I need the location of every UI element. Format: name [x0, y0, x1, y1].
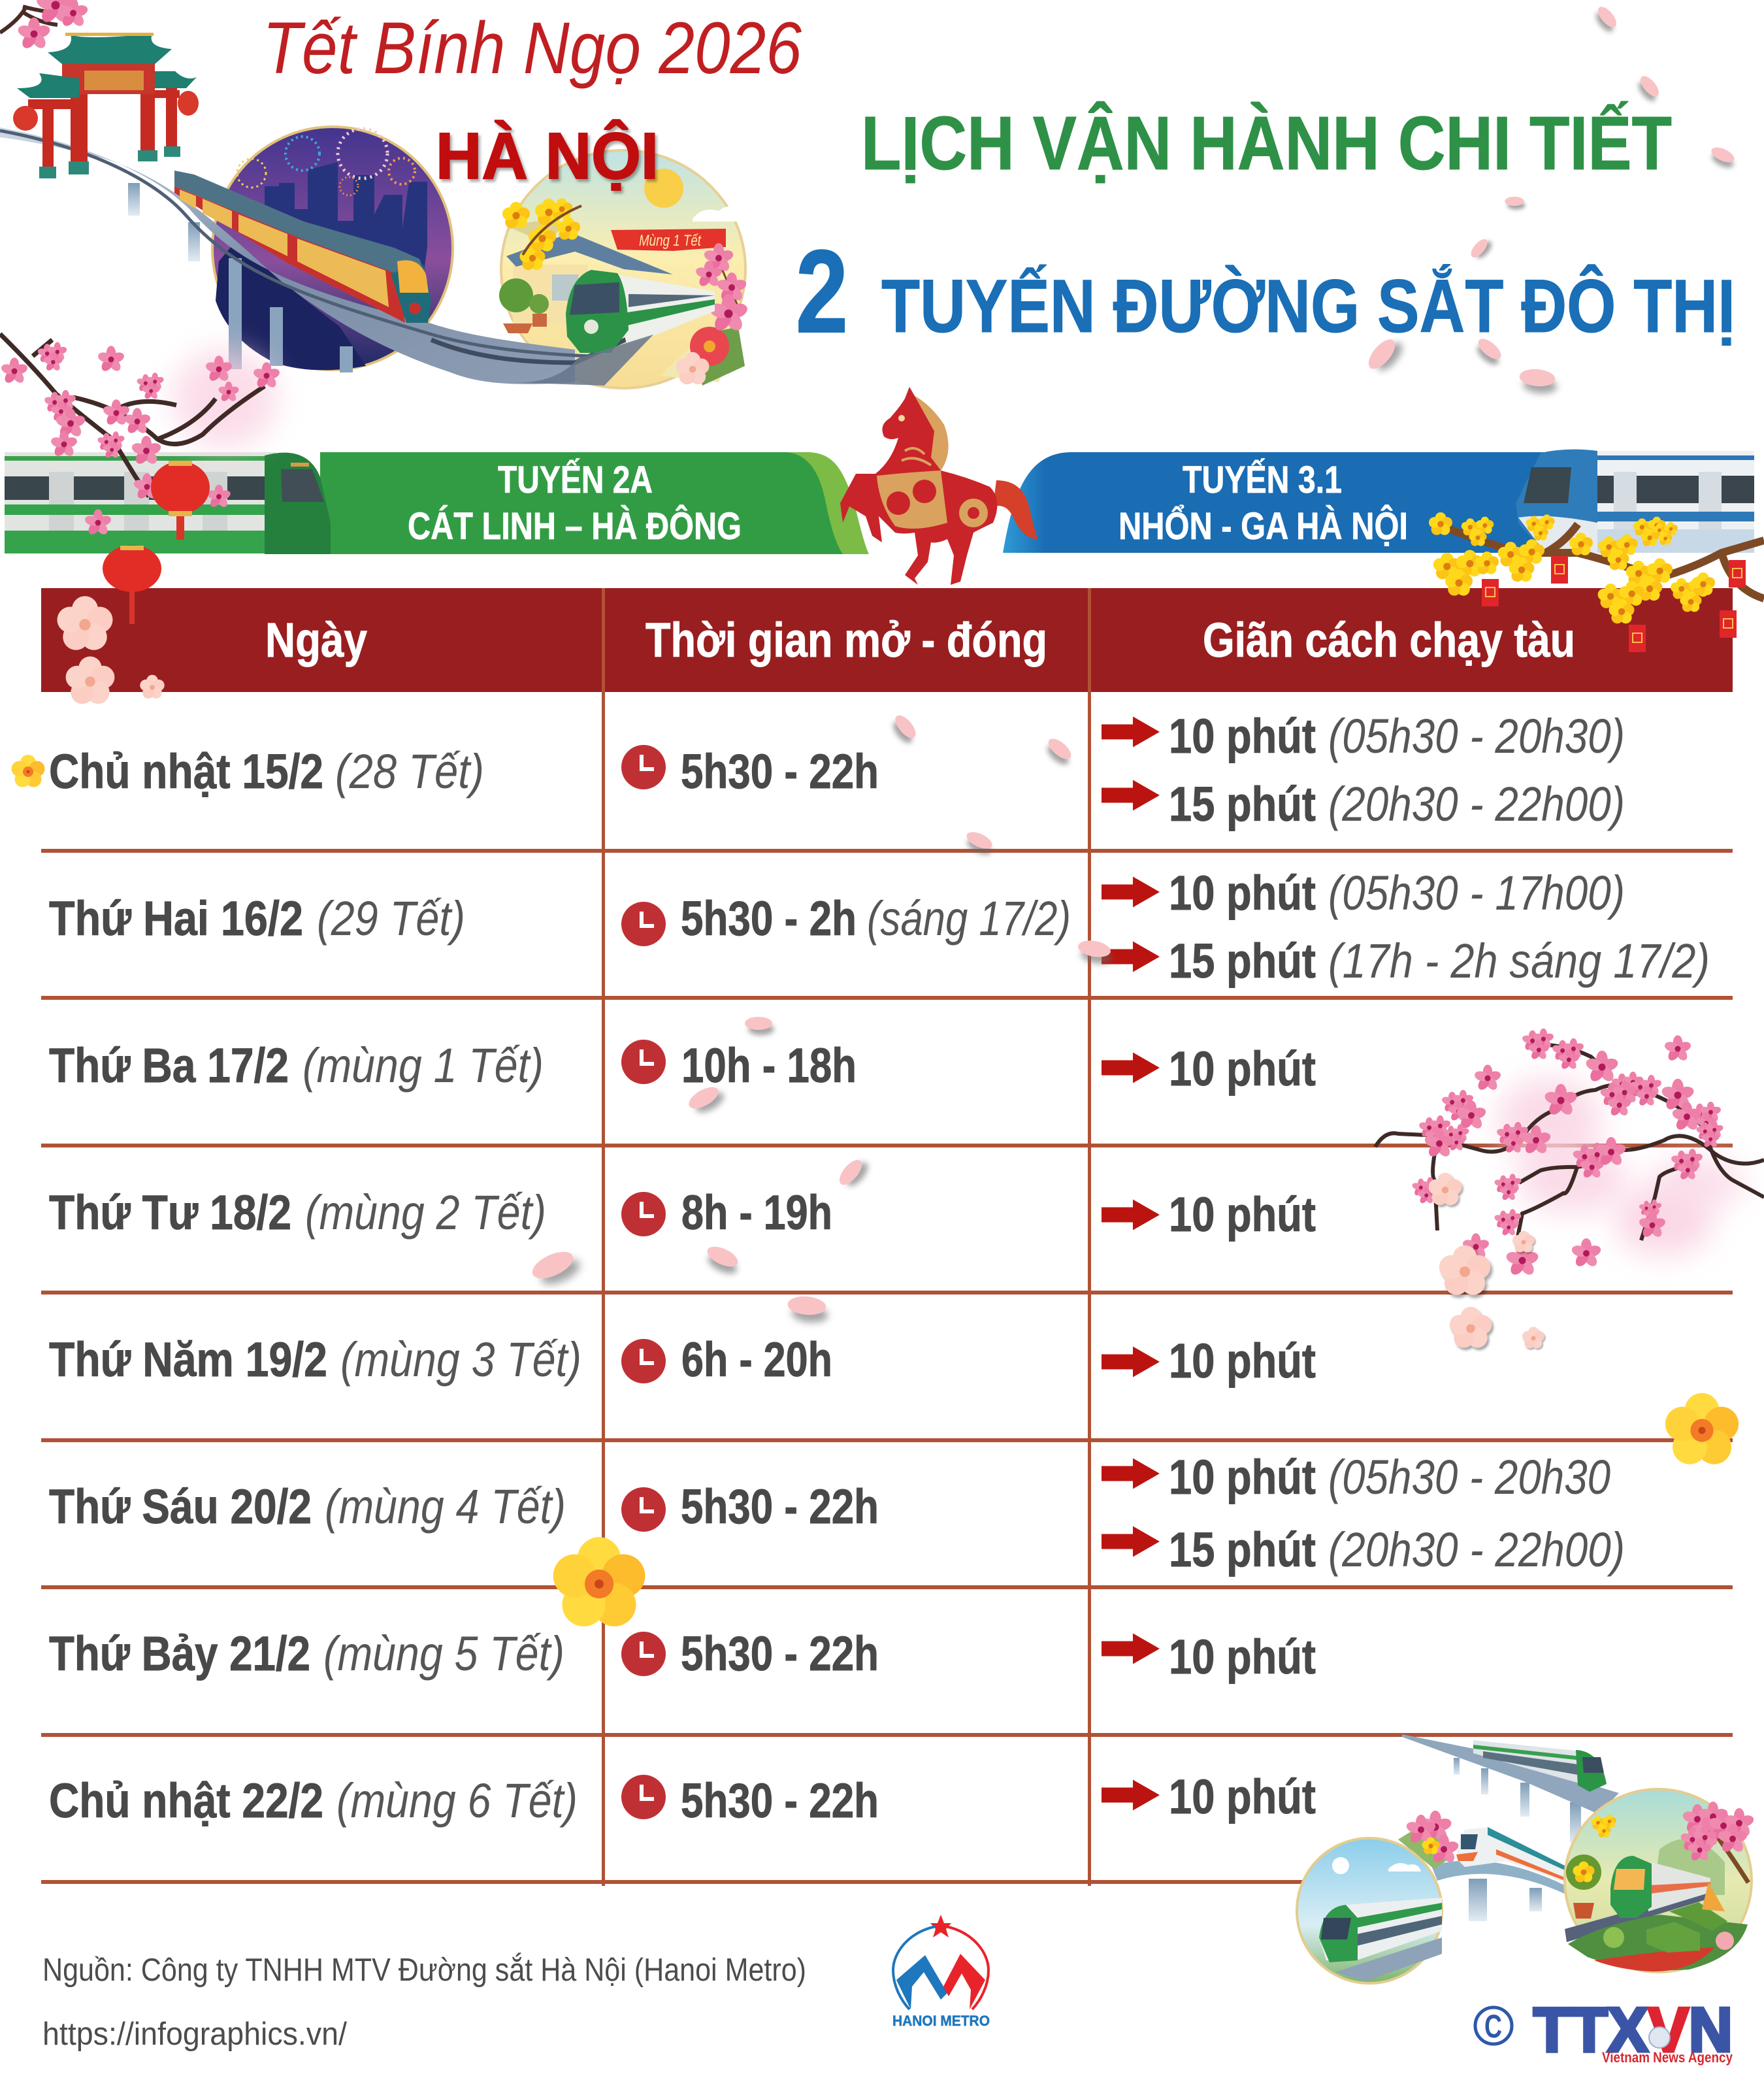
header: hours: Thời gian mở - đóng [645, 613, 1047, 667]
train: green metro at station [566, 270, 715, 353]
row: Sunday 15/2: (28 Tết) [335, 744, 484, 799]
row: Sunday 22/2: Chủ nhật 22/2 [49, 1773, 323, 1828]
row: Tuesday 17/2: Thứ Ba 17/2 [49, 1038, 289, 1093]
viaduct and green train [1402, 1734, 1619, 1843]
row: Wednesday 18/2: 10 phút [1169, 1187, 1316, 1242]
row: Saturday 21/2: 5h30 - 22h [681, 1626, 879, 1681]
scene circle: green train in the sky [1297, 1838, 1442, 1983]
row: Sunday 15/2: (20h30 - 22h00) [1328, 777, 1625, 831]
title line 2: 2 [796, 226, 848, 357]
row: Friday 20/2: 5h30 - 22h [681, 1479, 879, 1534]
train: red Tet metro [174, 171, 431, 323]
row: Saturday 21/2: Thứ Bảy 21/2 [49, 1626, 310, 1681]
row: Tuesday 17/2: (mùng 1 Tết) [302, 1038, 544, 1093]
row: Tuesday 17/2: 10h - 18h [681, 1038, 857, 1093]
row: Friday 20/2: 10 phút [1169, 1450, 1316, 1504]
row: Monday 16/2: 10 phút [1169, 866, 1316, 920]
globe on logo [1649, 2027, 1670, 2048]
zodiac horse [840, 387, 1037, 585]
row: Thursday 19/2: 10 phút [1169, 1334, 1316, 1388]
row: Friday 20/2: (mùng 4 Tết) [325, 1479, 566, 1534]
wordmark TTXVN: TTXVN [1533, 1995, 1733, 2065]
illustration: Tet metro scene [0, 127, 749, 388]
decoration: peach blossom branch [1375, 1029, 1764, 1349]
row: Saturday 21/2: (mùng 5 Tết) [323, 1626, 564, 1681]
decoration: header corner flowers [57, 596, 165, 704]
viaduct and metro train [1398, 1811, 1565, 1921]
row: Sunday 15/2: 10 phút [1169, 709, 1316, 763]
schedule table [41, 588, 1733, 1886]
decoration: yellow apricot branch [1429, 512, 1764, 652]
row: Monday 16/2: (05h30 - 17h00) [1328, 866, 1625, 920]
lantern: banner [151, 461, 210, 540]
scene circle: spring station [499, 150, 749, 388]
lantern: table corner [103, 545, 161, 624]
row: Wednesday 18/2: 8h - 19h [681, 1185, 832, 1240]
row: Tuesday 17/2 [49, 1038, 1316, 1096]
row: Sunday 22/2 [49, 1770, 1316, 1828]
logo: Hanoi Metro [892, 1915, 990, 2029]
row: Monday 16/2: (29 Tết) [317, 891, 465, 946]
row: Monday 16/2: 15 phút [1169, 934, 1316, 988]
row: Friday 20/2: (05h30 - 20h30 [1328, 1450, 1610, 1504]
rail front tracks [506, 335, 653, 386]
script title: Tết Bính Ngọ 2026 [263, 7, 802, 89]
row: Monday 16/2: 5h30 - 2h [681, 891, 857, 946]
label: Cát Linh – Hà Đông: CÁT LINH – HÀ ĐÔNG [408, 505, 742, 548]
row: Sunday 22/2: (mùng 6 Tết) [336, 1773, 578, 1828]
decoration: falling petals [529, 4, 1738, 1324]
scene circle: Tet feast and train [1565, 1789, 1755, 1972]
header: Ngày: Ngày [265, 613, 367, 667]
row: Wednesday 18/2: (mùng 2 Tết) [305, 1185, 546, 1240]
train: green [5, 452, 331, 554]
agency name: Vietnam News Agency [1602, 2049, 1733, 2066]
row: Sunday 15/2: Chủ nhật 15/2 [49, 744, 323, 799]
row: Sunday 15/2 [49, 709, 1625, 831]
train: blue [1516, 450, 1754, 553]
label: Nhổn - Ga Hà Nội: NHỔN - GA HÀ NỘI [1119, 505, 1408, 548]
row: Wednesday 18/2 [49, 1185, 1316, 1242]
row: Friday 20/2: Thứ Sáu 20/2 [49, 1479, 312, 1534]
row: Saturday 21/2: 10 phút [1169, 1630, 1316, 1684]
copyright mark: C [1484, 2008, 1502, 2045]
row: Sunday 15/2: (05h30 - 20h30) [1328, 709, 1625, 763]
text: banner Mùng 1 Tết: Mùng 1 Tết [639, 232, 702, 250]
branch: top-left blossom [0, 0, 89, 51]
scene circle: fireworks city [212, 127, 453, 370]
logo: TTXVN [1475, 1995, 1733, 2066]
row: Thursday 19/2: Thứ Năm 19/2 [49, 1332, 327, 1387]
table header [41, 588, 1733, 692]
row: Monday 16/2: Thứ Hai 16/2 [49, 891, 303, 946]
rail viaduct [0, 127, 647, 384]
row: Thursday 19/2 [49, 1332, 1316, 1388]
row: Thursday 19/2: 6h - 20h [681, 1332, 832, 1387]
header: headway: Giãn cách chạy tàu [1203, 613, 1575, 667]
footer: website: https://infographics.vn/ [42, 2017, 347, 2052]
illustration: bottom-right Tet metro scene [1297, 1734, 1755, 1983]
banner: route 2A [5, 452, 869, 554]
row: Tuesday 17/2: 10 phút [1169, 1042, 1316, 1096]
row: Thursday 19/2: (mùng 3 Tết) [340, 1332, 581, 1387]
row: Sunday 22/2: 5h30 - 22h [681, 1773, 879, 1828]
footer: source: Nguồn: Công ty TNHH MTV Đường sắt Hà Nội (Hanoi Metro) [42, 1953, 806, 1988]
row: Monday 16/2 [49, 866, 1710, 988]
row: Sunday 22/2: 10 phút [1169, 1770, 1316, 1824]
row: Sunday 15/2: 5h30 - 22h [681, 744, 879, 799]
decoration: left blossom branch [0, 334, 281, 536]
label: route 2A: TUYẾN 2A [498, 459, 653, 501]
banner: route 3.1 [1003, 450, 1754, 553]
label: route 3.1: TUYẾN 3.1 [1183, 459, 1342, 501]
decoration: yellow flowers [12, 755, 1739, 1626]
title line 2 [796, 226, 1735, 357]
row: Friday 20/2: 15 phút [1169, 1523, 1316, 1577]
row: Friday 20/2: (20h30 - 22h00) [1328, 1523, 1625, 1577]
row: Monday 16/2: (sáng 17/2) [867, 891, 1071, 946]
row: Friday 20/2 [49, 1450, 1625, 1577]
row: Sunday 15/2: 15 phút [1169, 777, 1316, 831]
row: Monday 16/2: (17h - 2h sáng 17/2) [1328, 934, 1710, 988]
row: Saturday 21/2 [49, 1626, 1316, 1684]
gate: Hanoi arch [13, 33, 199, 178]
row: Wednesday 18/2: Thứ Tư 18/2 [49, 1185, 291, 1240]
logo wordmark: HANOI METRO [892, 2013, 990, 2029]
heading: Hà Nội: HÀ NỘI [436, 120, 659, 193]
